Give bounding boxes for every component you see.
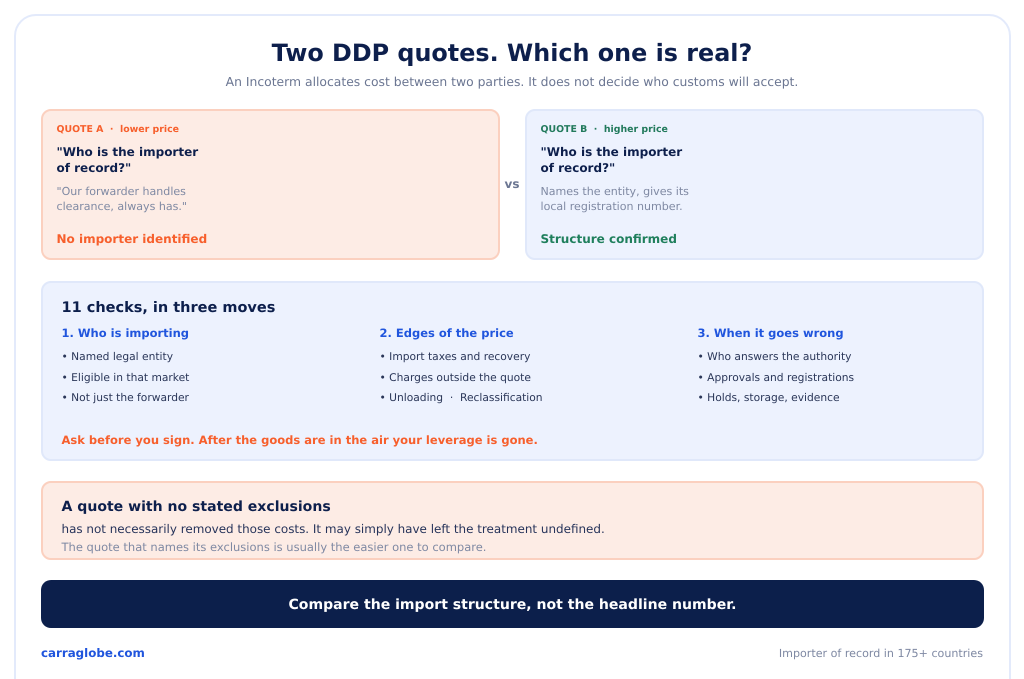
quote A answer: clearance, always has." (56, 200, 187, 213)
vs label: vs (504, 177, 519, 191)
quote B question: of record?" (540, 161, 615, 175)
column 1 list: • Eligible in that market (62, 370, 189, 384)
column 2 list: • Import taxes and recovery (380, 350, 530, 363)
checks heading: 11 checks, in three moves (62, 300, 275, 316)
quote A verdict: No importer identified (56, 232, 207, 246)
column 3 list: • Who answers the authority (698, 350, 851, 363)
quote B answer: Names the entity, gives its (540, 185, 689, 198)
subtitle: An Incoterm allocates cost between two parties. It does not decide who customs will accept. (226, 75, 798, 89)
quote A label: QUOTE A · lower price (56, 124, 179, 135)
quote B label: QUOTE B · higher price (540, 124, 668, 135)
column 2 list: • Unloading · Reclassification (380, 391, 543, 404)
column 3 (698, 326, 854, 404)
quote B question: "Who is the importer (540, 145, 682, 159)
quote B question (540, 145, 682, 175)
exclusions note: The quote that names its exclusions is usually the easier one to compare. (62, 540, 486, 554)
panel: 11 checks (41, 281, 984, 461)
column 1 (62, 326, 190, 404)
banner (41, 580, 984, 628)
banner text: Compare the import structure, not the headline number. (288, 596, 736, 612)
column 1 list (62, 350, 190, 404)
column 1 list: • Named legal entity (62, 350, 173, 363)
quote A question: "Who is the importer (56, 145, 198, 159)
column 2 heading: 2. Edges of the price (380, 326, 514, 340)
column 3 list: • Approvals and registrations (698, 370, 854, 384)
exclusions body: has not necessarily removed those costs. It may simply have left the treatment undefined. (62, 522, 605, 536)
column 3 list: • Holds, storage, evidence (698, 391, 840, 404)
column 2 list: • Charges outside the quote (380, 370, 531, 384)
footer brand: carraglobe.com (41, 646, 145, 660)
panel: quote A (41, 109, 500, 260)
column 1 list: • Not just the forwarder (62, 391, 189, 404)
panel: exclusions (41, 481, 984, 560)
panel: quote B (525, 109, 984, 260)
column 3 heading: 3. When it goes wrong (698, 326, 844, 340)
column 2 list (380, 350, 543, 404)
quote A question: of record?" (56, 161, 131, 175)
exclusions heading: A quote with no stated exclusions (62, 498, 331, 514)
quote A answer (56, 185, 187, 213)
column 2 (380, 326, 543, 404)
quote A answer: "Our forwarder handles (56, 185, 186, 198)
quote B answer (540, 185, 689, 213)
column 3 list (698, 350, 854, 404)
footer note: Importer of record in 175+ countries (779, 647, 983, 660)
quote A question (56, 145, 198, 175)
quote B answer: local registration number. (540, 200, 683, 213)
quote B verdict: Structure confirmed (540, 232, 677, 246)
column 1 heading: 1. Who is importing (62, 326, 189, 340)
checks callout: Ask before you sign. After the goods are in the air your leverage is gone. (62, 432, 538, 446)
title: Two DDP quotes. Which one is real? (272, 39, 752, 67)
